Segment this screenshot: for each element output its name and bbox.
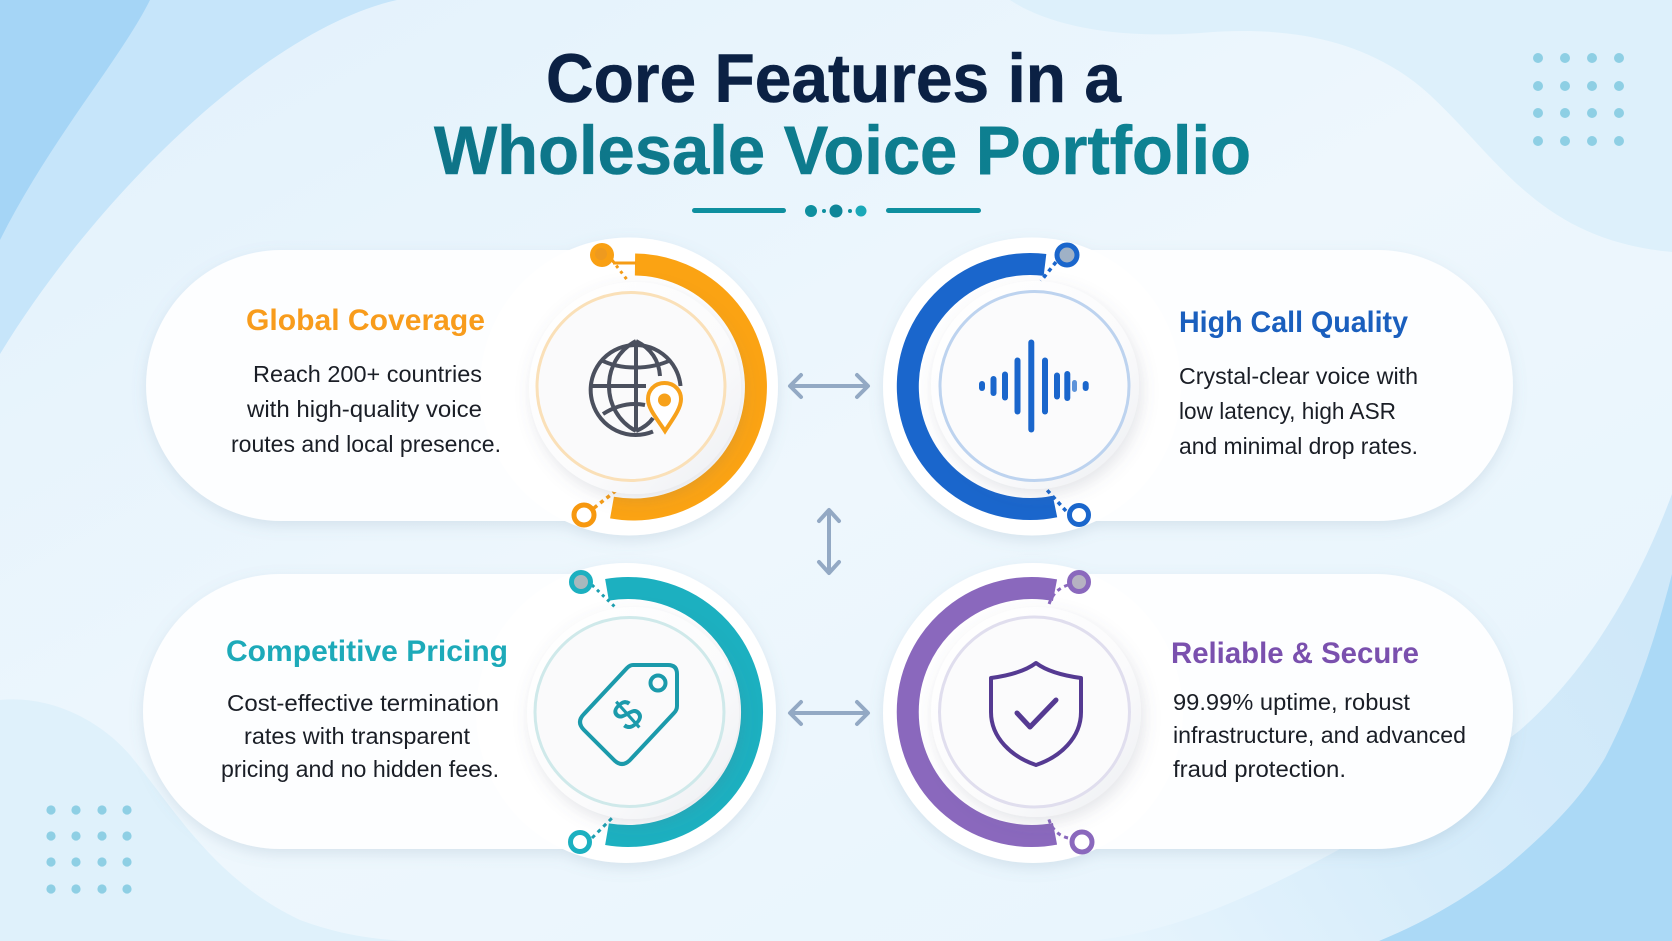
node dots [570,572,590,852]
panel: high call quality [883,238,1513,536]
title [434,40,1251,189]
title divider [692,204,981,218]
description: infrastructure, and advanced [1173,722,1466,748]
title: Core Features in a [546,40,1122,117]
decorative dots top right [1533,53,1624,146]
heading: Reliable & Secure [1171,637,1419,670]
connectors [592,585,615,838]
connectors [1041,262,1066,511]
description: routes and local presence. [231,431,501,457]
icon: globe with pin [591,341,681,435]
disc [527,607,739,819]
panel: competitive pricing [143,563,776,863]
description: with high-quality voice [246,396,482,422]
description: 99.99% uptime, robust [1173,689,1411,715]
icon: sound wave [979,340,1089,432]
description: Crystal-clear voice with [1179,363,1418,389]
blue ring [908,264,1055,509]
description: pricing and no hidden fees. [221,756,499,782]
description [231,361,501,457]
teal ring [607,588,752,836]
connectors [594,260,636,508]
icon: price tag: $ [603,689,652,740]
description [1179,363,1418,459]
arrow: top horizontal [790,375,868,397]
node dots [1070,572,1092,852]
description [221,690,499,782]
arrow: bottom horizontal [790,702,868,724]
description: Reach 200+ countries [253,361,482,387]
heading: Competitive Pricing [226,635,508,668]
icon: shield with check [991,663,1081,765]
title: Wholesale Voice Portfolio [434,112,1251,189]
description: fraud protection. [1173,756,1346,782]
disc [931,281,1139,489]
node dots [574,243,614,525]
connectors [1048,585,1068,838]
description [1173,689,1466,782]
description: and minimal drop rates. [1179,433,1418,459]
panel: global coverage [146,238,778,536]
disc [529,282,741,494]
description: low latency, high ASR [1179,398,1396,424]
description: rates with transparent [244,723,471,749]
decorative dots bottom left [46,805,132,894]
node dots [1057,245,1088,524]
arrow: center vertical [819,510,839,573]
purple ring [908,588,1055,836]
heading: High Call Quality [1179,306,1408,339]
description: Cost-effective termination [227,690,499,716]
orange ring [612,264,756,509]
panel: reliable and secure [883,563,1513,863]
icon: price tag [580,665,677,764]
heading: Global Coverage [246,304,485,337]
disc [931,607,1141,817]
